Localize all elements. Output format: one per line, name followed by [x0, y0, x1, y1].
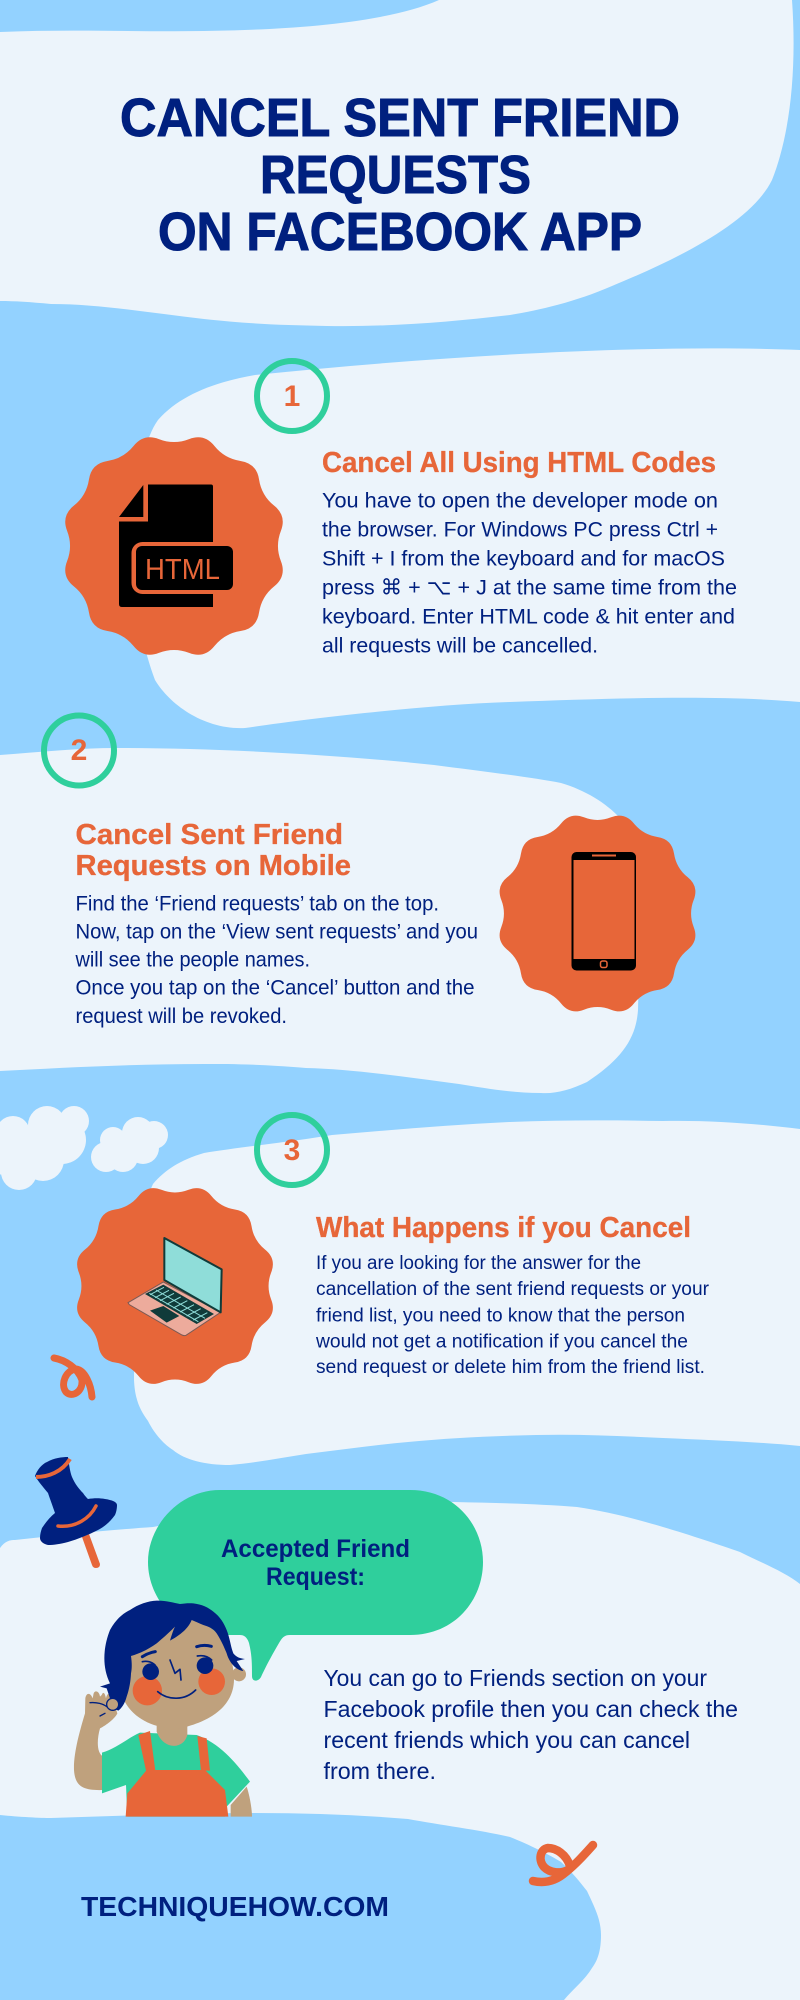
speech bubble	[148, 1490, 483, 1681]
decoration: orange swirl right	[533, 1845, 593, 1882]
heading: Cancel All Using HTML Codes	[322, 447, 716, 479]
body text: You have to open the developer mode on	[322, 488, 718, 512]
icon: push pin	[35, 1457, 117, 1568]
panel: step 3 background	[134, 1120, 800, 1465]
body text: will see the people names.	[75, 948, 310, 972]
heading	[76, 819, 351, 882]
accepted request text	[324, 1665, 738, 1784]
body text: Find the ‘Friend requests’ tab on the top.	[76, 892, 439, 916]
panel: step 1 background	[135, 348, 800, 728]
decoration: clouds	[0, 1106, 168, 1190]
body text	[322, 488, 737, 658]
accepted request text: Facebook profile then you can check the	[324, 1696, 738, 1722]
heading: Requests on Mobile	[76, 850, 351, 882]
speech bubble: Request:	[266, 1563, 365, 1591]
number badge 2: 2	[71, 734, 87, 767]
title: ON FACEBOOK APP	[158, 202, 642, 262]
title: REQUESTS	[260, 145, 531, 205]
number badge 1	[257, 361, 327, 431]
panel: footer blob	[0, 1813, 601, 2000]
icon: phone badge	[500, 816, 695, 1011]
number badge 3: 3	[284, 1134, 300, 1167]
decoration: orange swirl left	[54, 1358, 92, 1397]
icon: HTML file badge	[65, 437, 283, 655]
heading: Cancel Sent Friend	[76, 819, 343, 851]
body text: all requests will be cancelled.	[322, 634, 598, 658]
body text: the browser. For Windows PC press Ctrl +	[322, 518, 718, 542]
body text: send request or delete him from the friend list.	[316, 1357, 705, 1378]
title	[120, 88, 680, 262]
number badge 2	[44, 716, 114, 786]
title: CANCEL SENT FRIEND	[120, 88, 680, 148]
heading: What Happens if you Cancel	[316, 1212, 691, 1244]
panel: title background	[0, 0, 794, 326]
step 2 section	[44, 716, 695, 1028]
accepted request text: recent friends which you can cancel	[324, 1727, 690, 1753]
footer website: TECHNIQUEHOW.COM	[81, 1891, 389, 1922]
icon: HTML file badge: HTML	[145, 554, 220, 586]
body text: Now, tap on the ‘View sent requests’ and you	[76, 920, 478, 944]
step 1 section	[65, 361, 737, 658]
icon: laptop badge	[77, 1188, 273, 1384]
panel: step 2 background	[0, 748, 638, 1093]
body text: cancellation of the sent friend requests or your	[316, 1279, 710, 1300]
step 3 section	[77, 1115, 710, 1384]
body text: request will be revoked.	[76, 1005, 287, 1028]
speech bubble: Accepted Friend	[221, 1535, 410, 1563]
body text: press ⌘ + ⌥ + J at the same time from the	[322, 576, 737, 600]
body text: If you are looking for the answer for the	[316, 1253, 641, 1274]
body text: would not get a notification if you cancel the	[315, 1332, 688, 1352]
body text: Once you tap on the ‘Cancel’ button and the	[76, 976, 474, 1000]
accepted request text: You can go to Friends section on your	[324, 1665, 707, 1691]
accepted request text: from there.	[324, 1758, 436, 1784]
panel: accepted request background	[0, 1500, 800, 2000]
number badge 1: 1	[284, 380, 300, 413]
number badge 3	[257, 1115, 327, 1185]
body text	[75, 892, 478, 1028]
body text: Shift + I from the keyboard and for macOS	[322, 546, 725, 570]
body text: keyboard. Enter HTML code & hit enter and	[322, 604, 735, 628]
body text: friend list, you need to know that the person	[316, 1306, 685, 1326]
character: kid waving	[74, 1601, 252, 1817]
body text	[315, 1253, 710, 1378]
